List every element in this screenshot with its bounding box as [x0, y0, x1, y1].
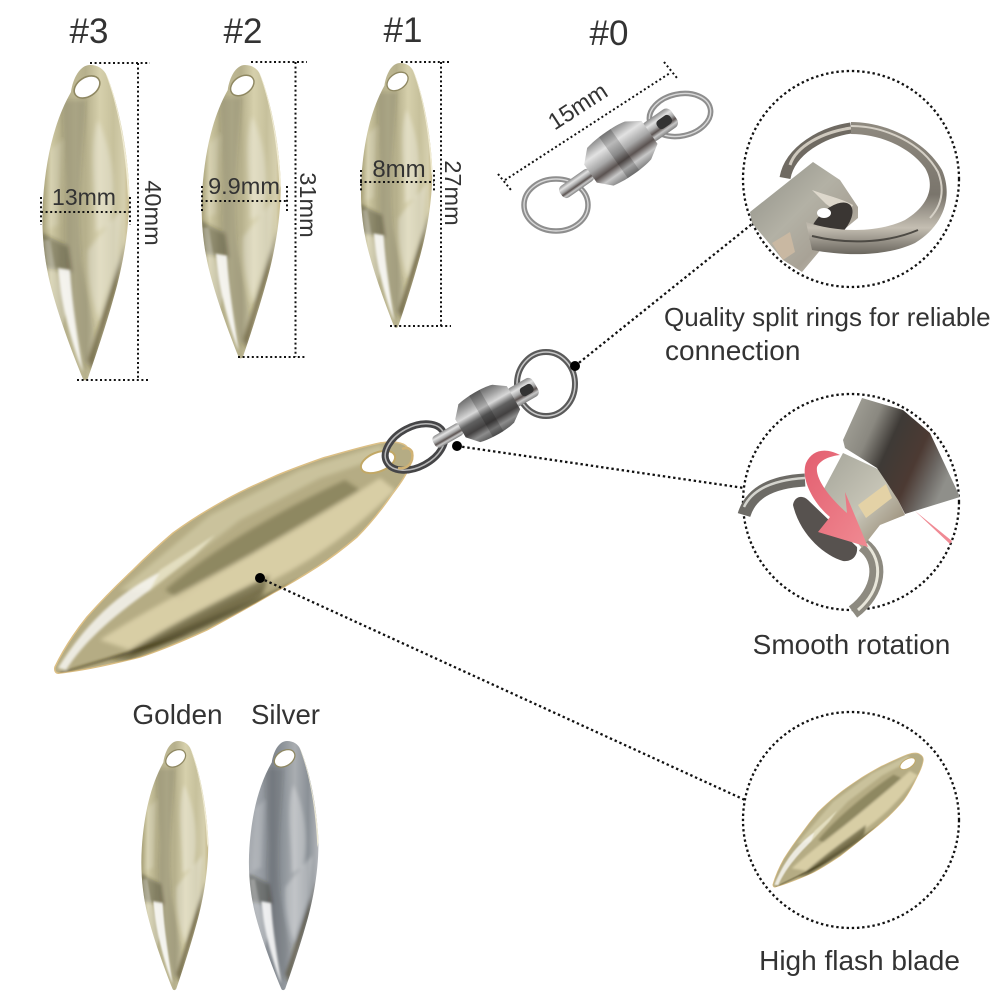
blade #2 — [200, 65, 281, 358]
left split ring — [377, 414, 453, 480]
length label 27mm: 27mm — [440, 160, 466, 226]
ring close-up — [744, 478, 878, 612]
pink pointer — [915, 511, 952, 544]
blade #3 — [40, 65, 130, 380]
heading #0: #0 — [590, 14, 628, 53]
width label 13mm: 13mm — [52, 184, 116, 210]
width label 9.9mm: 9.9mm — [208, 173, 280, 199]
dimension lines #3 — [41, 63, 150, 380]
dimension lines #1 — [360, 62, 451, 326]
detail circle: split ring — [743, 71, 959, 287]
heading #2: #2 — [224, 12, 262, 51]
golden blade — [140, 741, 209, 990]
blade close-up — [755, 752, 940, 888]
top split ring — [517, 352, 575, 416]
label Golden: Golden — [132, 699, 223, 730]
leader line: rotation — [452, 441, 744, 488]
swivel barrel cone — [843, 398, 960, 514]
size column #1 — [359, 11, 466, 328]
swivel eye close-up — [750, 162, 860, 272]
split ring front band — [806, 122, 947, 254]
colour options — [132, 699, 320, 990]
back strand of split ring — [785, 128, 851, 178]
swivel #0 — [524, 88, 715, 231]
main assembled lure — [55, 352, 575, 674]
caption: split rings — [664, 302, 991, 366]
caption: blade: High flash blade — [759, 945, 960, 976]
length label 15mm: 15mm — [543, 78, 612, 135]
heading #3: #3 — [70, 12, 108, 51]
swivel eye close-up — [793, 497, 857, 561]
size column #3 — [40, 12, 166, 380]
caption: rotation: Smooth rotation — [753, 629, 950, 660]
size column #2 — [200, 12, 321, 358]
label Silver: Silver — [251, 699, 320, 730]
silver blade — [247, 741, 319, 990]
detail circle: blade — [743, 712, 959, 928]
leader line: split rings — [570, 224, 752, 371]
rotation arrow — [805, 451, 868, 547]
swivel shaft — [818, 453, 905, 548]
leader line: blade — [255, 573, 745, 800]
width label 8mm: 8mm — [372, 156, 426, 183]
detail circle: rotation — [743, 394, 960, 612]
blade #1 — [359, 63, 433, 328]
caption: split rings: Quality split rings for reliable — [664, 302, 991, 332]
heading #1: #1 — [384, 11, 422, 50]
gold thread detail — [858, 484, 892, 518]
length label 31mm: 31mm — [295, 172, 321, 238]
dimension lines #2 — [201, 62, 307, 357]
caption: split rings: connection — [665, 335, 800, 366]
dimension line 15mm — [498, 62, 677, 190]
length label 40mm: 40mm — [140, 180, 166, 246]
size column #0 swivel — [498, 14, 715, 231]
main blade — [55, 442, 412, 674]
ball bearing swivel — [422, 364, 548, 464]
